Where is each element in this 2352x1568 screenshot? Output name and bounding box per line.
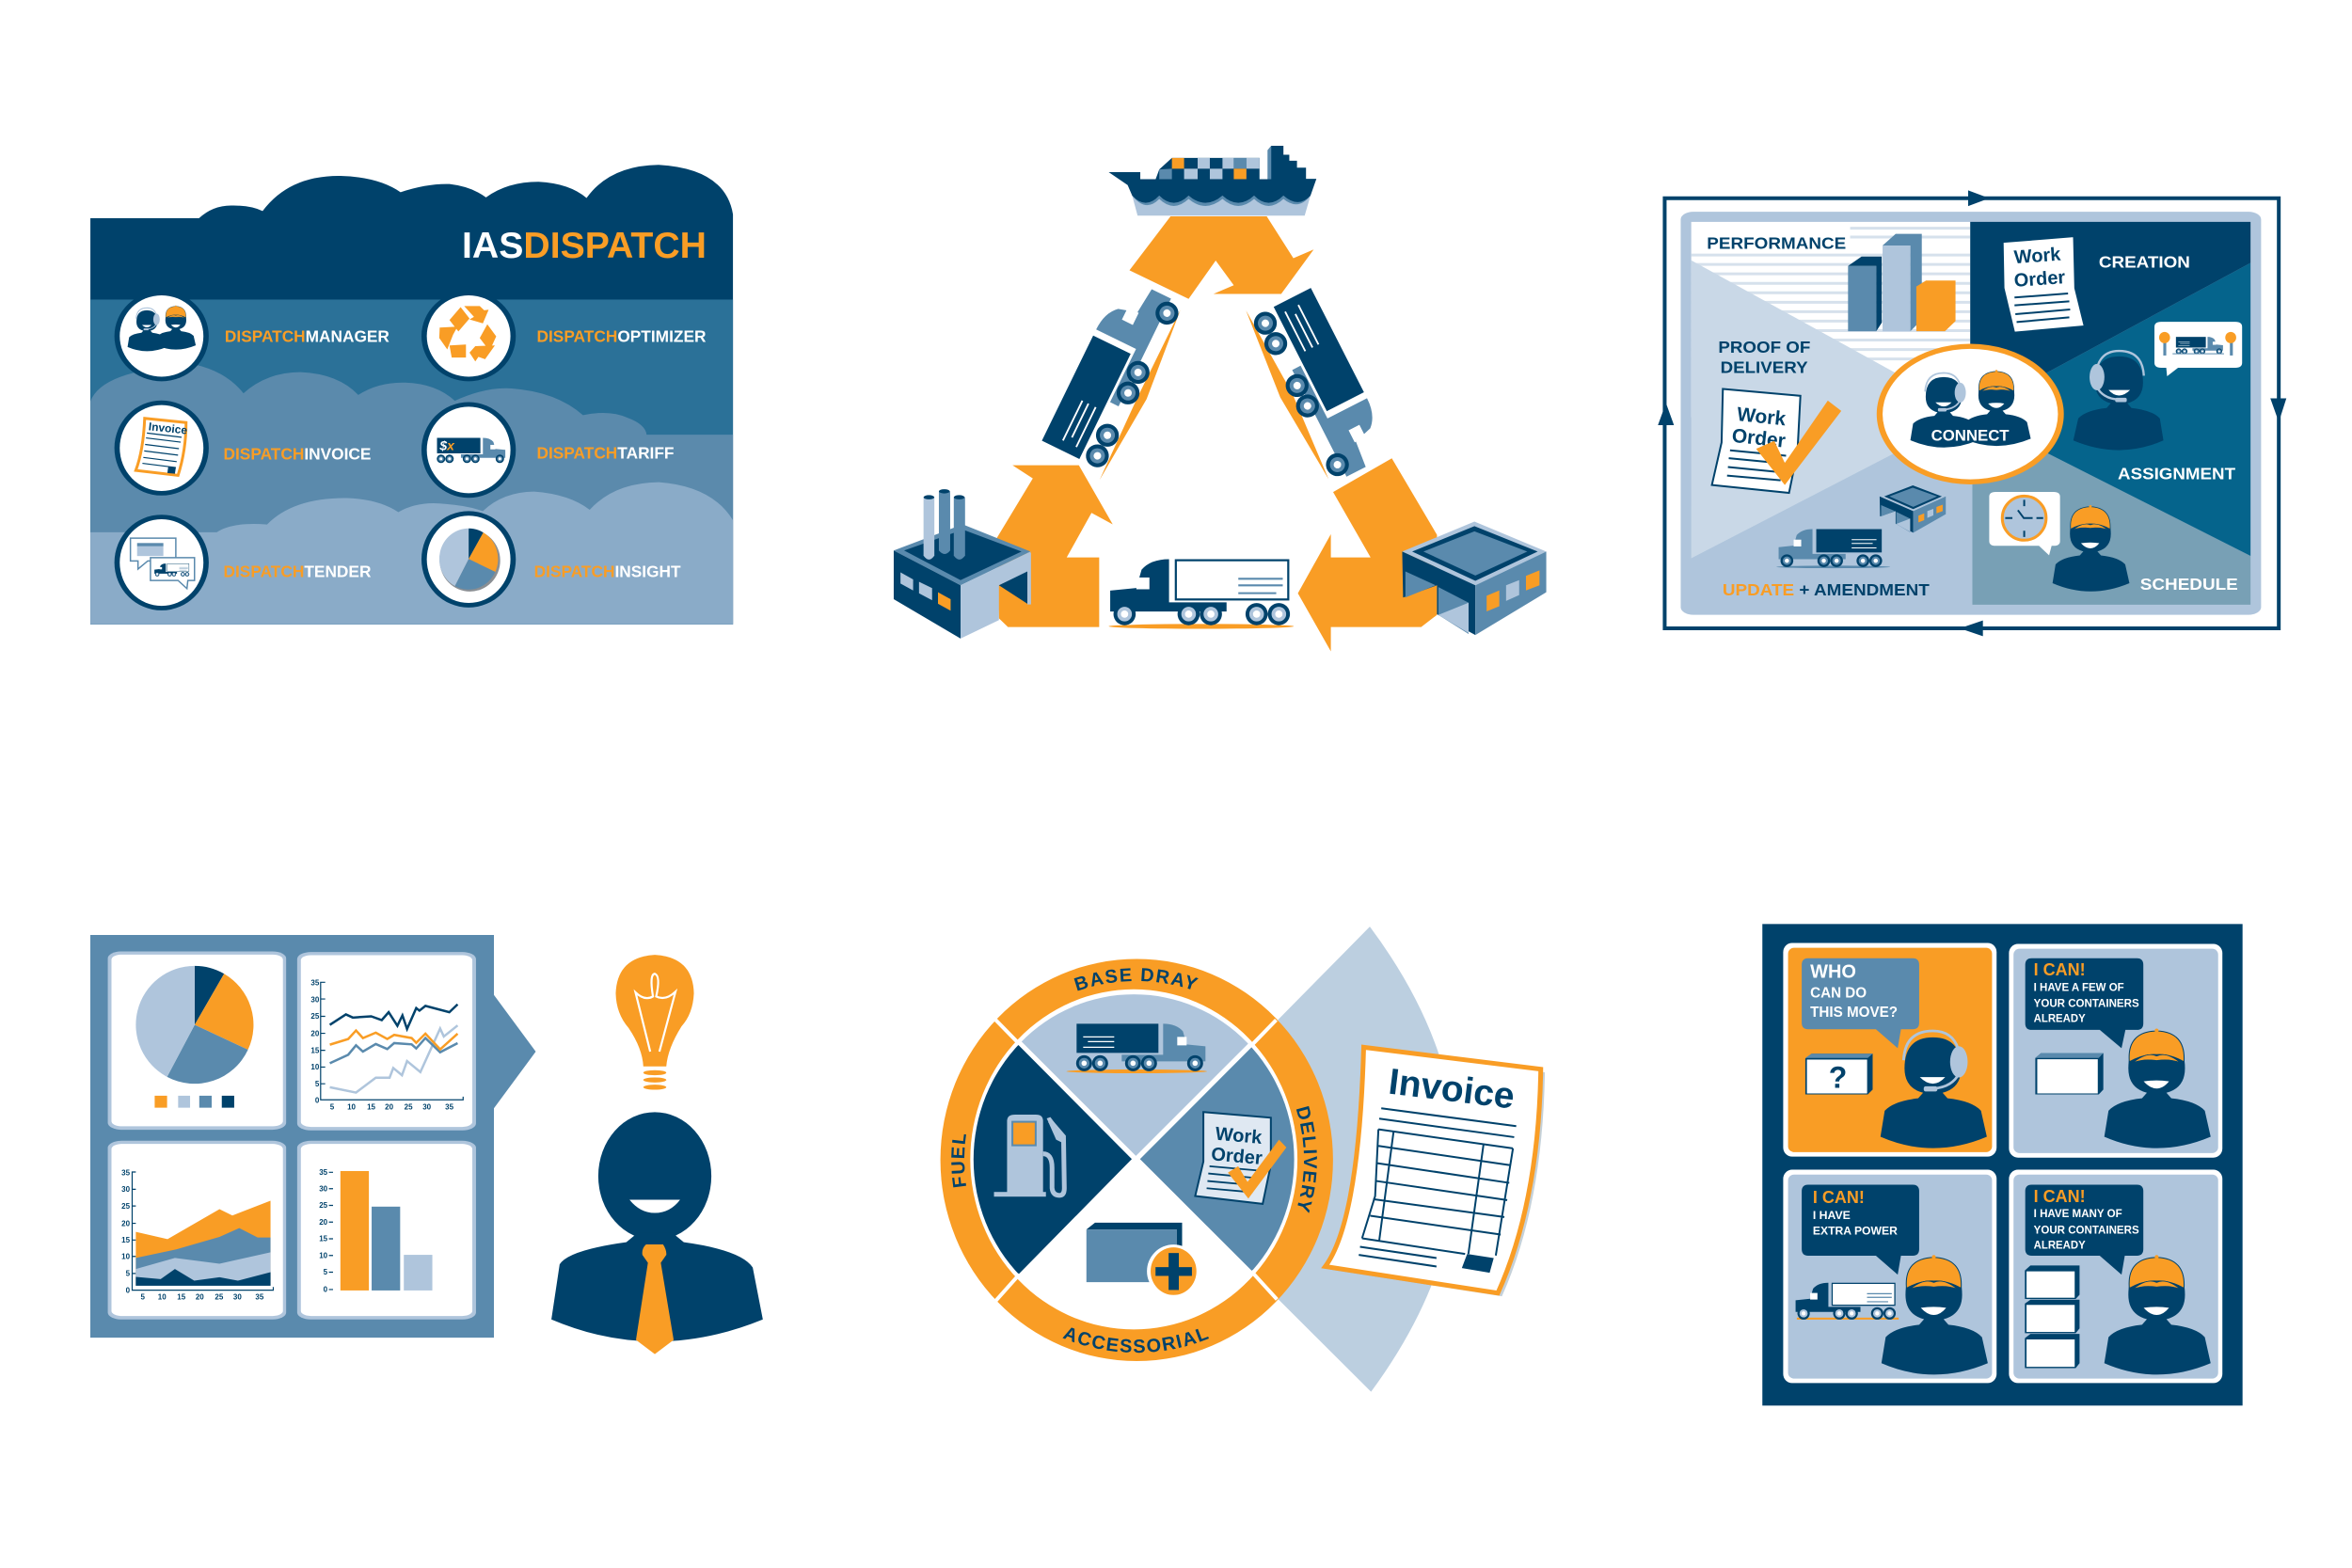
icon: truck climbing left side (1041, 275, 1184, 480)
card: area chart: 10 (158, 1293, 167, 1302)
icon: manager and driver (115, 291, 209, 381)
card: few containers driver: I CAN! (2034, 960, 2086, 979)
card: area chart: 25 (215, 1293, 224, 1302)
card: bar chart (297, 1141, 476, 1320)
icon: signed work order with check (1712, 388, 1841, 493)
card: many containers driver: I CAN! (2034, 1187, 2086, 1206)
card: bar chart: 20 (319, 1218, 328, 1227)
rounded base (1680, 212, 2261, 615)
icon: truck on bottom (1108, 559, 1294, 628)
card: area chart: 30 (121, 1185, 131, 1194)
arrow: left recycling arrow (996, 466, 1113, 627)
card: dispatcher question (1783, 942, 1996, 1157)
icon: warehouse (1402, 522, 1547, 635)
card: bar chart: 30 (319, 1184, 328, 1193)
icon: small warehouse (1880, 483, 1946, 532)
arrow: right recycling arrow (1298, 458, 1437, 652)
card: few containers driver: ALREADY (2034, 1013, 2086, 1024)
icon: factory (894, 489, 1031, 639)
card: extra power driver: I CAN! (1813, 1188, 1865, 1207)
heading: PERFORMANCE: PERFORMANCE (1707, 233, 1846, 252)
icon: truck tariff: $x (438, 438, 455, 453)
panel: IAS Dispatch product family (90, 165, 733, 625)
icon: truck tariff (421, 402, 516, 498)
card: dispatcher question: WHO (1810, 962, 1856, 983)
ring label: FUEL: FUEL (951, 1134, 966, 1187)
ring dividers (994, 1019, 1277, 1301)
sector: assignment (1970, 262, 2250, 556)
heading: PROOF OF DELIVERY (1718, 338, 1810, 377)
card: bar chart: 15 (319, 1235, 328, 1243)
label: DISPATCHMANAGER: DISPATCHMANAGER (225, 326, 389, 345)
icon: light bulb (615, 955, 694, 1090)
card: line chart: 30 (422, 1103, 432, 1112)
speech bubble: clock (1989, 492, 2060, 555)
connect hub (1877, 344, 2064, 484)
icon: work order document: Order (2013, 267, 2066, 292)
fan behind wheel (1278, 927, 1456, 1392)
panel: intermodal cycle (894, 146, 1547, 652)
card: bar chart: 25 (319, 1201, 328, 1210)
icon: invoice: Invoice (148, 420, 188, 437)
card: few containers driver: I HAVE A FEW OF (2034, 982, 2124, 993)
heading: SCHEDULE: SCHEDULE (2140, 575, 2238, 594)
title: IASDISPATCH: IASDISPATCH (462, 226, 707, 266)
card: many containers driver: ALREADY (2034, 1240, 2086, 1251)
heading: CREATION: CREATION (2099, 252, 2190, 271)
label: DISPATCHTENDER: DISPATCHTENDER (223, 562, 371, 581)
ring label: DELIVERY: DELIVERY (1296, 1106, 1317, 1213)
card: line chart: 25 (310, 1012, 320, 1021)
icon: truck descending right side (1246, 288, 1394, 483)
sector: performance (1692, 222, 1970, 418)
card: bar chart: 0 (324, 1286, 328, 1294)
card: area chart: 10 (121, 1252, 131, 1260)
icon: work order with check: Work (1215, 1124, 1263, 1148)
card: dispatcher question: CAN DO (1810, 985, 1867, 1001)
panel: invoice wheel (941, 927, 1545, 1392)
card: bar chart: 5 (324, 1268, 328, 1276)
card: area chart: 35 (255, 1293, 264, 1302)
card: bar chart: 35 (319, 1168, 328, 1177)
icon: truck (1776, 530, 1890, 568)
card: many containers driver (2009, 1170, 2222, 1383)
arrow: top recycling arrow (1130, 216, 1313, 299)
dashboard arrow background (90, 935, 535, 1338)
card: area chart: 20 (121, 1219, 131, 1227)
icon: work order document: Work (2013, 245, 2062, 268)
card: line chart: 35 (310, 979, 320, 988)
icon: recycle (421, 291, 516, 381)
wheel sectors (973, 994, 1295, 1274)
sector: creation (1970, 222, 2250, 414)
card: dispatcher question: ? (1829, 1061, 1847, 1095)
bar chart icon (1848, 234, 1956, 331)
card: area chart: 0 (126, 1286, 131, 1294)
label: DISPATCHTARIFF: DISPATCHTARIFF (536, 444, 674, 463)
card: line chart: 20 (385, 1103, 394, 1112)
card: many containers driver: YOUR CONTAINERS (2034, 1225, 2139, 1236)
card: area chart: 5 (126, 1270, 131, 1278)
icon: businessman (551, 1112, 763, 1354)
icon: accessorial box with plus (1087, 1223, 1200, 1298)
card: line chart: 10 (310, 1063, 320, 1071)
icon: invoice (115, 401, 209, 496)
card: few containers driver: YOUR CONTAINERS (2034, 998, 2139, 1009)
icon: work order with check (1195, 1112, 1286, 1204)
panel: who can do this move (1762, 924, 2243, 1405)
heading: PROOF OF DELIVERY: PROOF OF (1718, 338, 1810, 356)
wheel ring (941, 958, 1333, 1361)
label: DISPATCHINVOICE: DISPATCHINVOICE (223, 444, 371, 463)
card: line chart (297, 952, 476, 1131)
card: line chart: 5 (315, 1080, 320, 1088)
icon: driver with cap (2053, 505, 2129, 592)
card: few containers driver (2009, 943, 2222, 1158)
card: line chart: 30 (310, 995, 320, 1004)
card: extra power driver: EXTRA POWER (1813, 1226, 1899, 1237)
card: area chart: 30 (233, 1293, 242, 1302)
heading: ASSIGNMENT: ASSIGNMENT (2118, 465, 2235, 483)
label: DISPATCHOPTIMIZER: DISPATCHOPTIMIZER (536, 326, 706, 345)
panel: insight dashboard (90, 935, 763, 1354)
card: extra power driver (1783, 1170, 1996, 1383)
card: line chart: 15 (367, 1103, 376, 1112)
icon: container ship (1108, 146, 1316, 215)
icon: signed work order with check: Work (1736, 404, 1788, 430)
icon: truck (1066, 1023, 1207, 1073)
heading: PROOF OF DELIVERY: DELIVERY (1721, 358, 1808, 377)
icon: insight pie (421, 511, 516, 608)
card: area chart: 20 (196, 1293, 204, 1302)
card: bar chart: 10 (319, 1251, 328, 1259)
icon: tender speech bubbles (115, 515, 209, 610)
icon: fuel pump (994, 1115, 1064, 1196)
cycle frame with arrows (1658, 190, 2286, 636)
card: line chart: 15 (310, 1046, 320, 1054)
connect hub: CONNECT (1931, 427, 2010, 445)
icon: invoice page (1326, 1047, 1545, 1296)
card: area chart: 35 (121, 1169, 131, 1178)
ring label: BASE DRAY: BASE DRAY (1074, 968, 1199, 991)
cloud background (90, 165, 733, 625)
card: line chart: 25 (405, 1103, 413, 1112)
card: many containers driver: I HAVE MANY OF (2034, 1209, 2122, 1220)
panel: work order cycle (1658, 190, 2286, 636)
sector: update and amendment (1692, 414, 1970, 605)
card: area chart: 15 (121, 1236, 131, 1244)
card: area chart: 5 (140, 1293, 145, 1302)
heading: UPDATE + AMENDMENT: UPDATE + AMENDMENT (1723, 580, 1930, 599)
sector: proof of delivery (1692, 261, 1970, 559)
card: extra power driver: I HAVE (1813, 1211, 1851, 1222)
sector: schedule (1972, 414, 2250, 605)
icon: invoice page: Invoice (1387, 1062, 1517, 1117)
icon: work order with check: Order (1210, 1144, 1263, 1169)
label: DISPATCHINSIGHT: DISPATCHINSIGHT (534, 562, 681, 581)
card: area chart (108, 1141, 286, 1320)
card: dispatcher question: THIS MOVE? (1810, 1005, 1898, 1021)
icon: dispatcher with headset (2074, 351, 2164, 451)
card: area chart: 25 (121, 1202, 131, 1211)
icon: signed work order with check: Order (1731, 425, 1787, 452)
card: line chart: 0 (315, 1097, 320, 1105)
card: area chart: 15 (177, 1293, 186, 1302)
card: pie chart (108, 951, 286, 1130)
background (1762, 924, 2243, 1405)
icon: work order document (2003, 237, 2084, 332)
card: line chart: 5 (330, 1103, 335, 1112)
card: line chart: 20 (310, 1029, 320, 1037)
ring label: ACCESSORIAL: ACCESSORIAL (1063, 1327, 1209, 1353)
speech bubble: truck with paddles (2154, 322, 2242, 376)
card: line chart: 10 (347, 1103, 357, 1112)
card: line chart: 35 (445, 1103, 454, 1112)
